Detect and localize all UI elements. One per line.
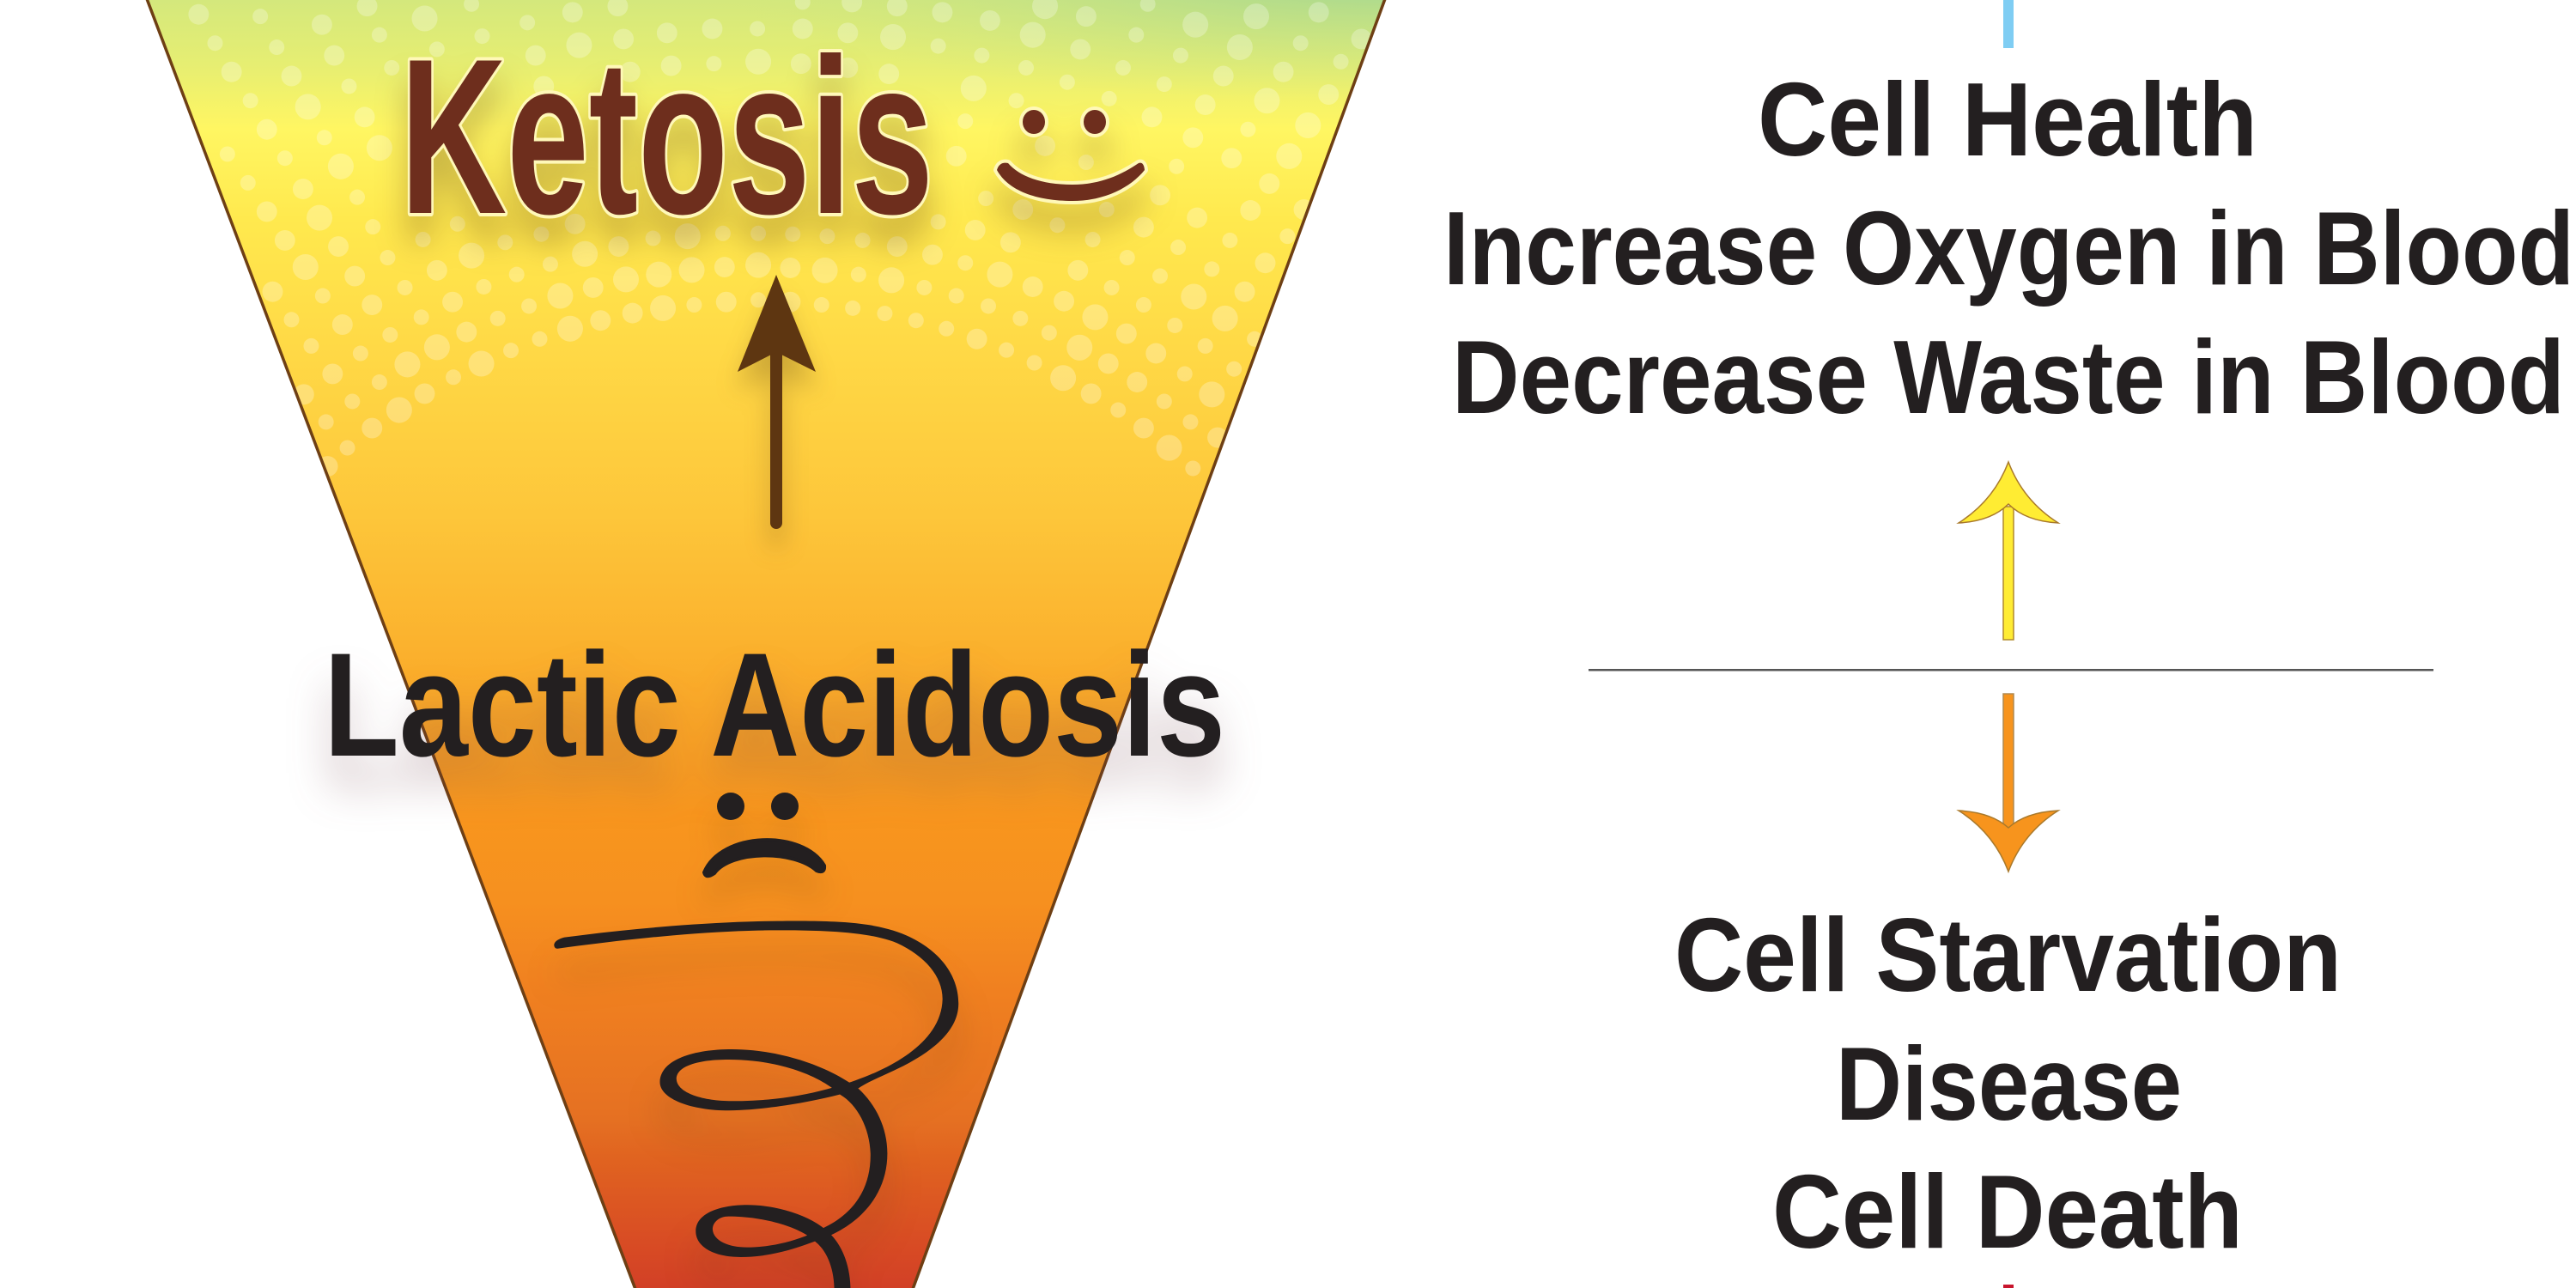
line: Cell Health: Cell Health bbox=[1758, 61, 2257, 178]
divider line bbox=[1589, 669, 2433, 671]
icon: sad face bbox=[704, 793, 824, 876]
line: Disease: Disease bbox=[1836, 1025, 2182, 1142]
arrow: yellow up bbox=[1959, 462, 2058, 640]
text block: benefits bbox=[1443, 61, 2574, 435]
line: Cell Starvation: Cell Starvation bbox=[1674, 896, 2342, 1013]
heading: Ketosis: Ketosis bbox=[400, 12, 933, 260]
funnel outline bbox=[146, 0, 636, 1288]
line: Cell Death: Cell Death bbox=[1772, 1153, 2243, 1270]
heading: Lactic Acidosis: Lactic Acidosis bbox=[324, 623, 1225, 787]
text block: harms bbox=[1674, 896, 2342, 1270]
icon: smiley face bbox=[997, 108, 1145, 201]
connector: blue bar top bbox=[2003, 0, 2014, 48]
arrow: up to ketosis bbox=[738, 275, 816, 529]
funnel gradient body bbox=[146, 0, 1386, 1288]
icon: spiral squiggle bbox=[554, 921, 958, 1288]
connector: red bar bottom bbox=[2003, 1285, 2014, 1288]
arrow: orange down bbox=[1959, 694, 2058, 872]
funnel green corner tint bbox=[146, 0, 1386, 1288]
panel: funnel bbox=[146, 0, 1386, 1288]
